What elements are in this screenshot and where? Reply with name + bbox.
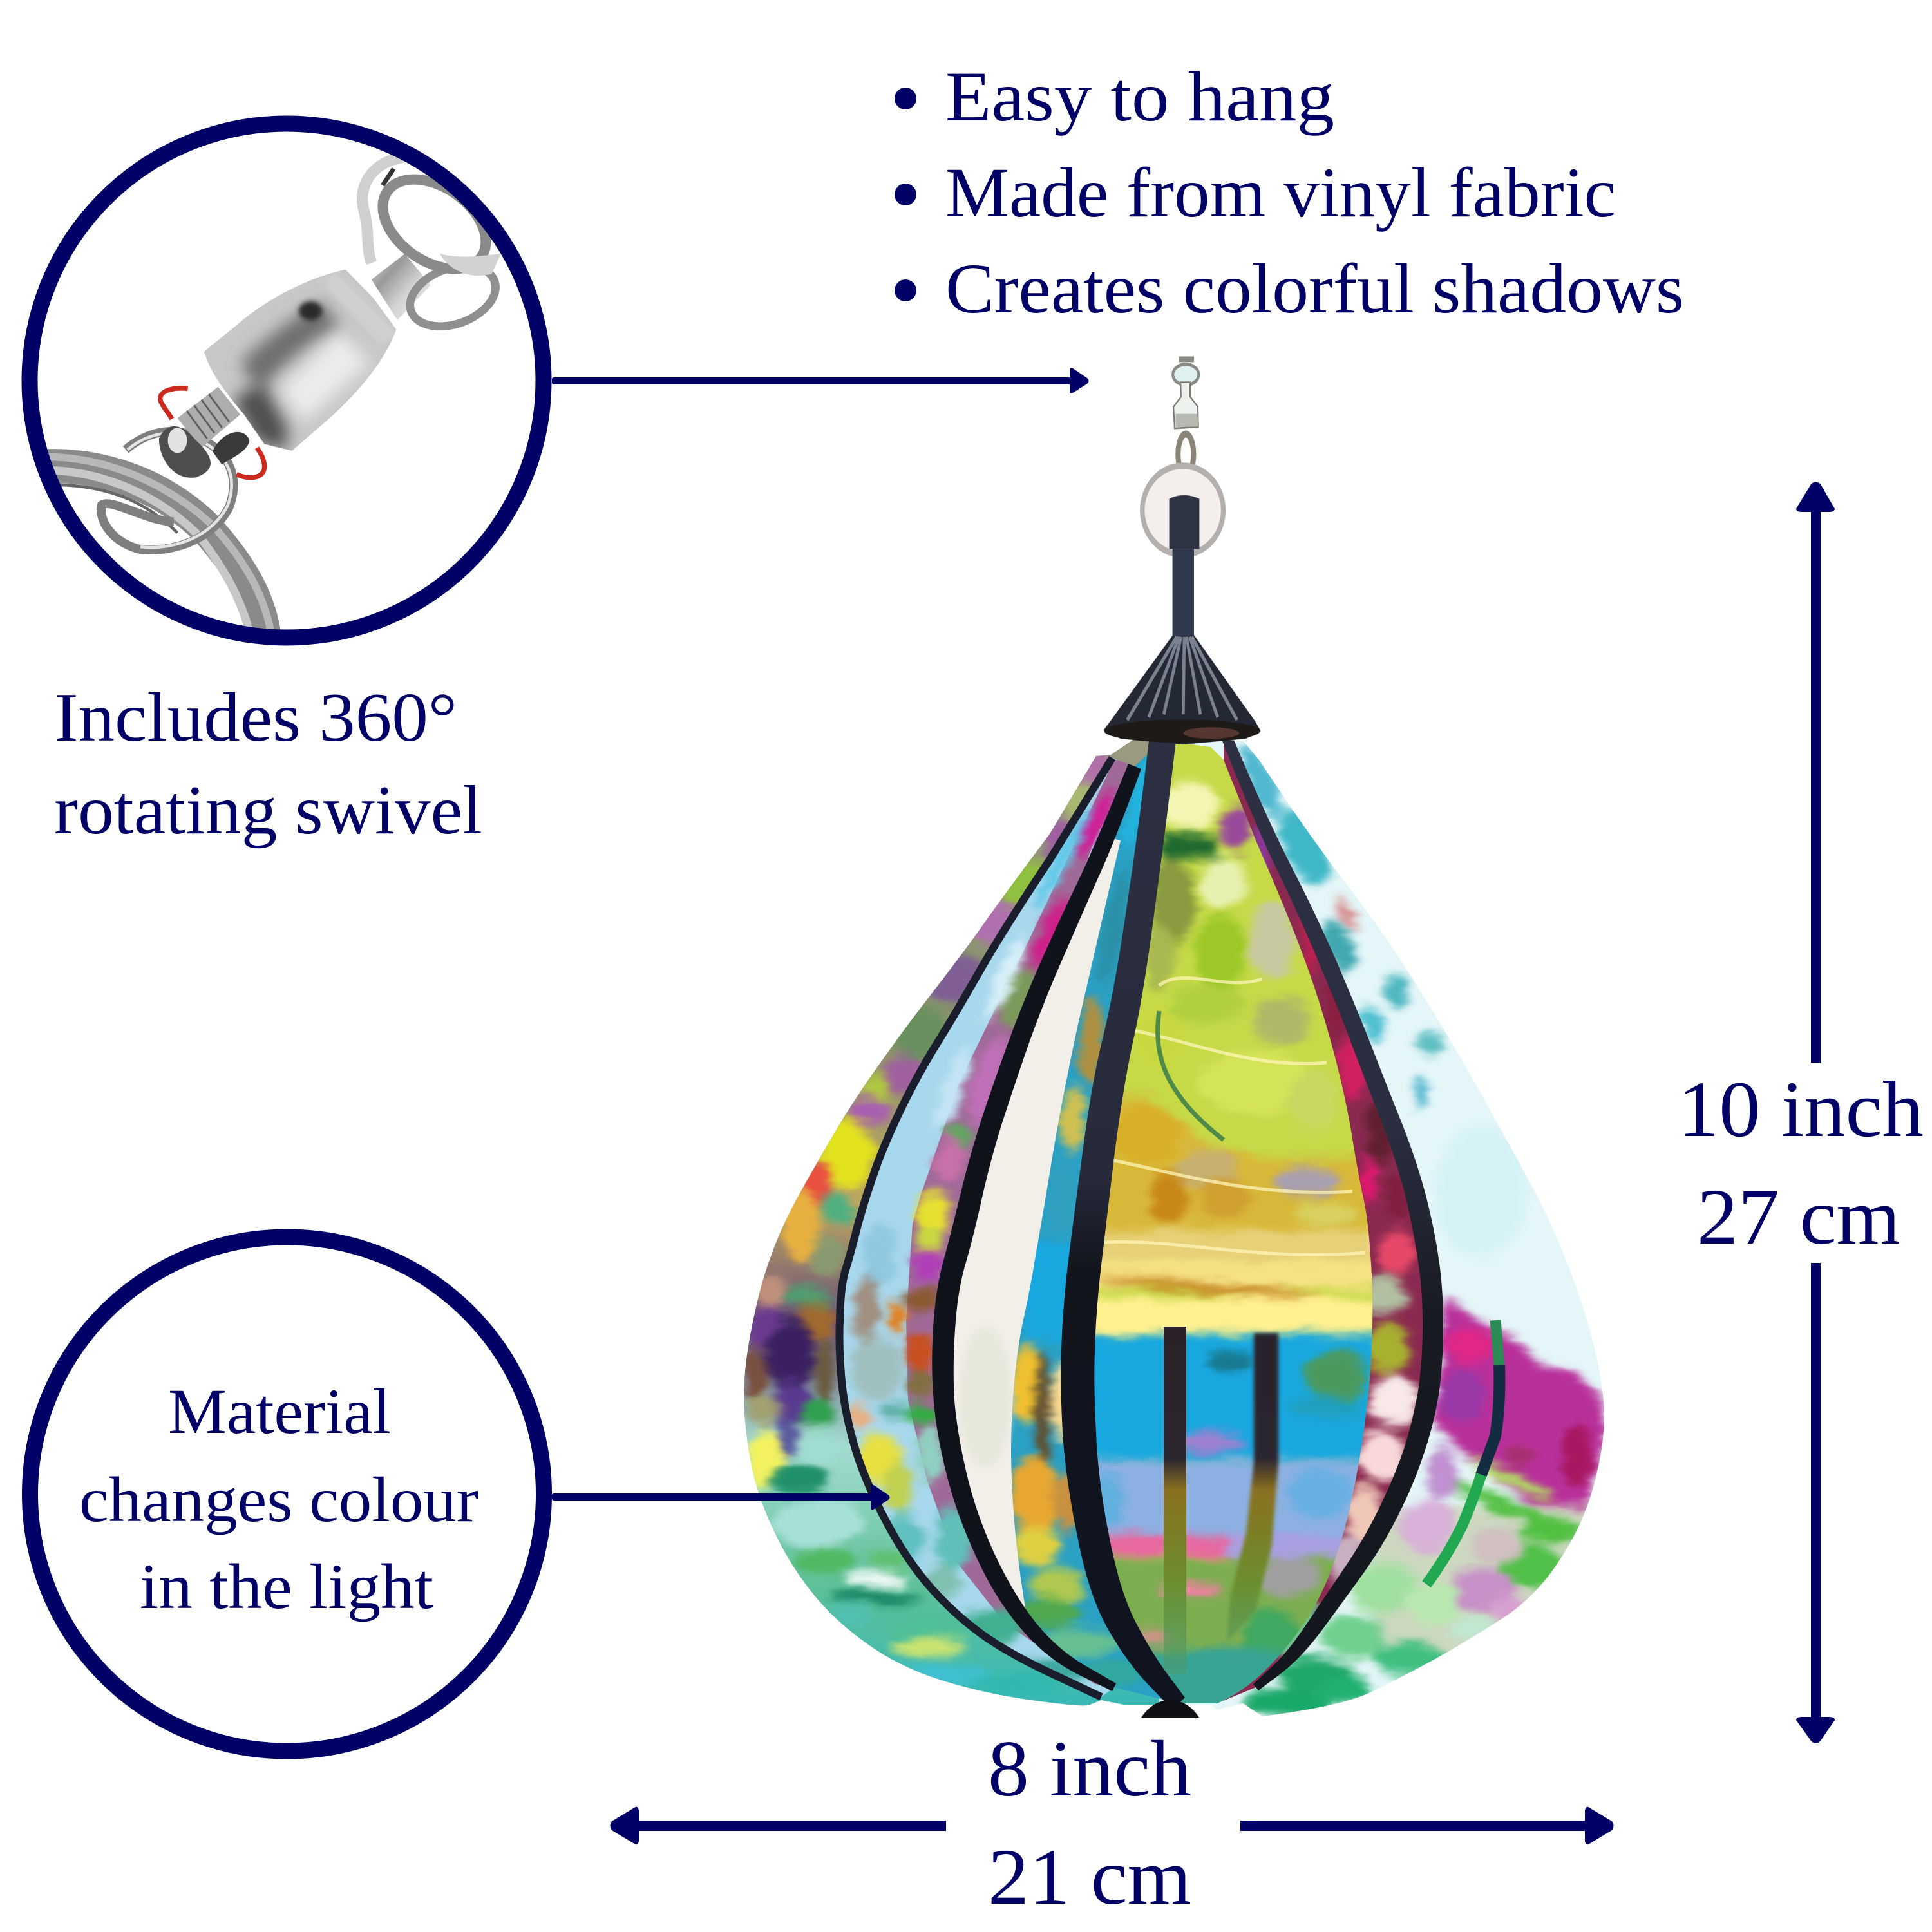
swivel detail circle (30, 124, 544, 638)
barrel top bevel (325, 270, 397, 345)
callout text: Material (168, 1376, 391, 1447)
feature bullet list (895, 57, 1684, 328)
mini swivel (1173, 383, 1198, 428)
height dimension (1678, 482, 1924, 1743)
barrel dark spot (299, 301, 323, 321)
upper ring highlight (440, 254, 501, 276)
cone stripes (1127, 637, 1237, 720)
glass panel between left ribs (805, 741, 1140, 1707)
swivel photo (41, 158, 504, 636)
rib centre (1061, 741, 1185, 1709)
cone rim (1104, 719, 1260, 743)
callout text: in the light (140, 1551, 433, 1622)
rib far left (840, 758, 1112, 1697)
teardrop body (708, 708, 1642, 1739)
hook dark (383, 169, 393, 185)
upper hook (363, 158, 403, 263)
outer panels left and right (708, 708, 1642, 1739)
green crease (1158, 1011, 1224, 1140)
centre petal (1063, 728, 1385, 1713)
arrow: swivel to hook (552, 368, 1088, 393)
rib right (1222, 735, 1443, 1690)
material callout circle (30, 1237, 544, 1751)
swivel circle ring (30, 124, 544, 638)
barrel shade upper (240, 302, 340, 392)
bullet: vinyl fabric: Made from vinyl fabric (945, 153, 1616, 232)
height arrow up (1796, 482, 1835, 1063)
height arrow down (1796, 1263, 1835, 1743)
upper ring (366, 161, 502, 287)
red arrow lower (236, 448, 265, 478)
hanger, cone and swivel (1104, 356, 1261, 744)
open gap and inner panel (934, 741, 1191, 1707)
rim reflection (1183, 727, 1239, 739)
swivel caption (54, 679, 482, 849)
barrel highlight (281, 333, 370, 422)
small ring highlight (128, 433, 232, 547)
rib left (932, 764, 1141, 1691)
glass strip (978, 934, 1032, 1023)
arrow: material to spinner (552, 1484, 890, 1510)
width label cm: 21 cm (988, 1833, 1191, 1921)
eye hole (213, 432, 249, 464)
reflected pole right (1227, 1333, 1278, 1642)
callout text (79, 1376, 478, 1622)
magenta zone (1433, 1301, 1607, 1513)
eyelet highlight (168, 428, 187, 453)
swivel barrel (204, 269, 397, 451)
thread marks (187, 394, 229, 439)
coloured sub panel (906, 760, 1140, 1687)
width dimension (611, 1725, 1614, 1921)
below magenta blobs (1372, 1507, 1604, 1662)
right panel dark band (1426, 1320, 1499, 1584)
upper neck (372, 254, 431, 320)
top ring (1173, 365, 1198, 385)
red arrow upper (160, 388, 188, 419)
cone (1104, 636, 1261, 744)
callout text: changes colour (79, 1464, 478, 1535)
width arrow left (611, 1807, 946, 1844)
lower link (1178, 434, 1193, 475)
large split ring (41, 457, 272, 636)
height label (1678, 1065, 1924, 1261)
lower upper ring (402, 255, 504, 337)
stem (1173, 549, 1194, 637)
height label: 27 cm (1697, 1173, 1900, 1261)
stem cap (1170, 495, 1199, 549)
swivel caption: rotating swivel (54, 772, 482, 849)
top hook (1179, 356, 1194, 362)
swivel shade (1176, 414, 1197, 427)
right upper blobs (1233, 741, 1291, 824)
left outer blobs (1079, 747, 1111, 799)
height label: 10 inch (1678, 1065, 1924, 1153)
swivel caption: Includes 360° (54, 679, 457, 756)
big ring (1142, 466, 1223, 554)
small ring (101, 431, 233, 550)
bullet: colorful shadows: Creates colorful shadows (945, 249, 1684, 328)
ribs clipped to body (840, 735, 1443, 1709)
barrel lower shade (233, 381, 289, 451)
base cap (1141, 1700, 1199, 1718)
spinner product illustration (708, 356, 1642, 1739)
reflected pole left (1164, 1327, 1186, 1674)
circle ring (30, 1237, 544, 1751)
width label inch: 8 inch (988, 1725, 1191, 1813)
golden streaks (1095, 978, 1365, 1255)
bullet: easy to hang: Easy to hang (945, 57, 1334, 136)
eyelet (159, 426, 211, 478)
width arrow right (1240, 1807, 1614, 1844)
right gap panel (1224, 741, 1443, 1707)
opening tint lower (960, 1327, 1011, 1468)
threaded stem (178, 387, 240, 448)
white opening (942, 837, 1121, 1620)
